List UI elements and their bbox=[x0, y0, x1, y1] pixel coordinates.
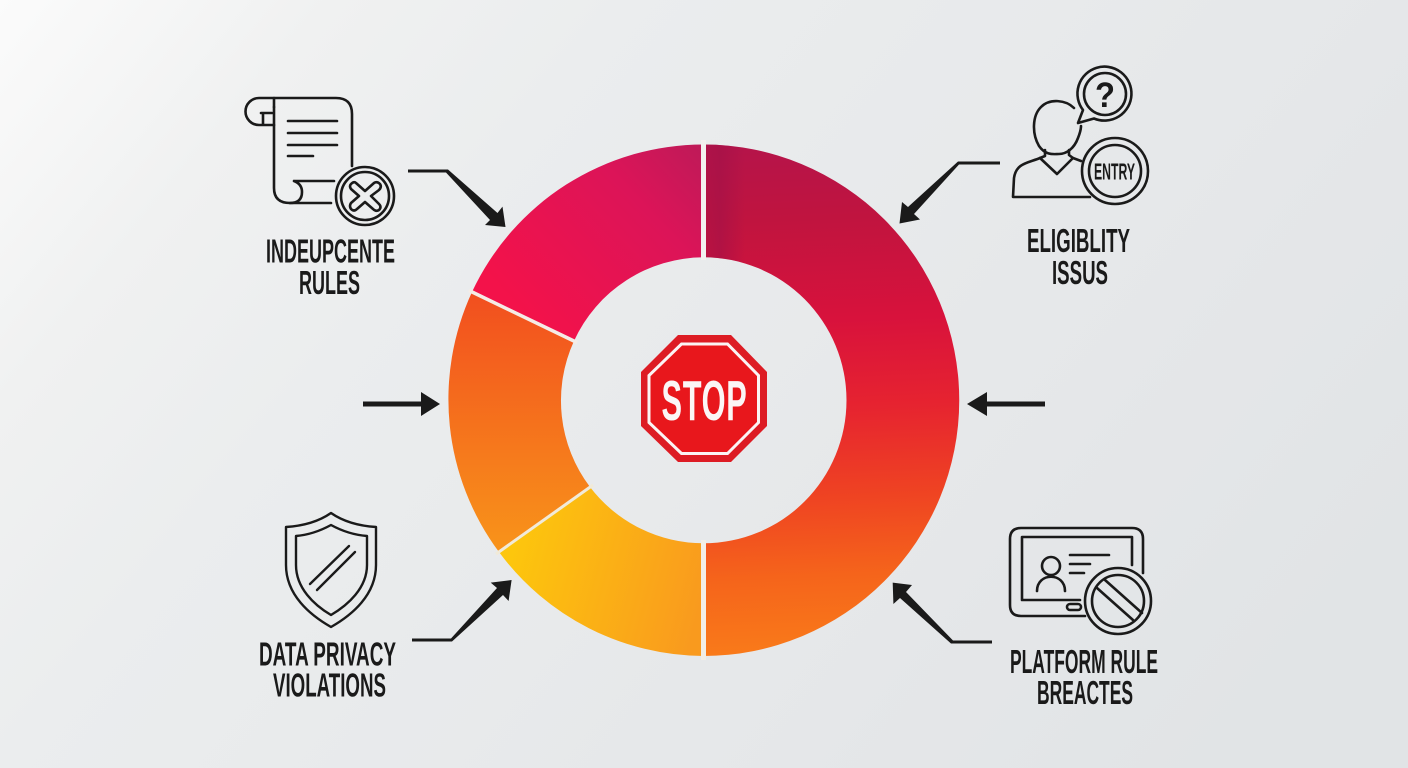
label: eligiblity issus bbox=[1027, 223, 1130, 292]
arrow: top left bbox=[408, 170, 506, 227]
icon: id screen with ban badge bbox=[1010, 528, 1151, 634]
label: data privacy violations: DATA PRIVACY bbox=[259, 636, 396, 674]
arrow: top right bbox=[900, 162, 1000, 224]
stop sign: STOP bbox=[662, 369, 748, 432]
label: eligiblity issus: ISSUS bbox=[1052, 255, 1108, 292]
stop sign bbox=[641, 335, 767, 462]
label: data privacy violations bbox=[259, 636, 396, 704]
label: indeupcente rules: RULES bbox=[299, 265, 360, 302]
arrow: bottom right bbox=[893, 583, 992, 644]
arrow: bottom left bbox=[412, 580, 512, 642]
label: indeupcente rules: INDEUPCENTE bbox=[266, 234, 395, 270]
icon: shield bbox=[286, 513, 376, 627]
arrow: middle right bbox=[967, 392, 1045, 416]
donut chart bbox=[448, 140, 959, 660]
label: data privacy violations: VIOLATIONS bbox=[273, 668, 386, 704]
label: platform rule breactes: BREACTES bbox=[1037, 675, 1133, 712]
question mark: ? bbox=[1095, 76, 1115, 115]
segment: bottom left bbox=[499, 487, 704, 656]
label: eligiblity issus: ELIGIBLITY bbox=[1027, 223, 1130, 260]
segment: middle left bbox=[448, 292, 590, 552]
label: indeupcente rules bbox=[266, 234, 395, 302]
label: platform rule breactes bbox=[1010, 644, 1158, 712]
segment: top left bbox=[472, 144, 704, 341]
icon: scroll with x badge bbox=[245, 98, 394, 225]
icon: person with question and entry badge bbox=[1013, 67, 1148, 204]
label: platform rule breactes: PLATFORM RULE bbox=[1010, 644, 1158, 681]
entry text: ENTRY bbox=[1094, 158, 1135, 184]
segment: right half bbox=[704, 144, 959, 656]
arrow: middle left bbox=[363, 392, 440, 416]
